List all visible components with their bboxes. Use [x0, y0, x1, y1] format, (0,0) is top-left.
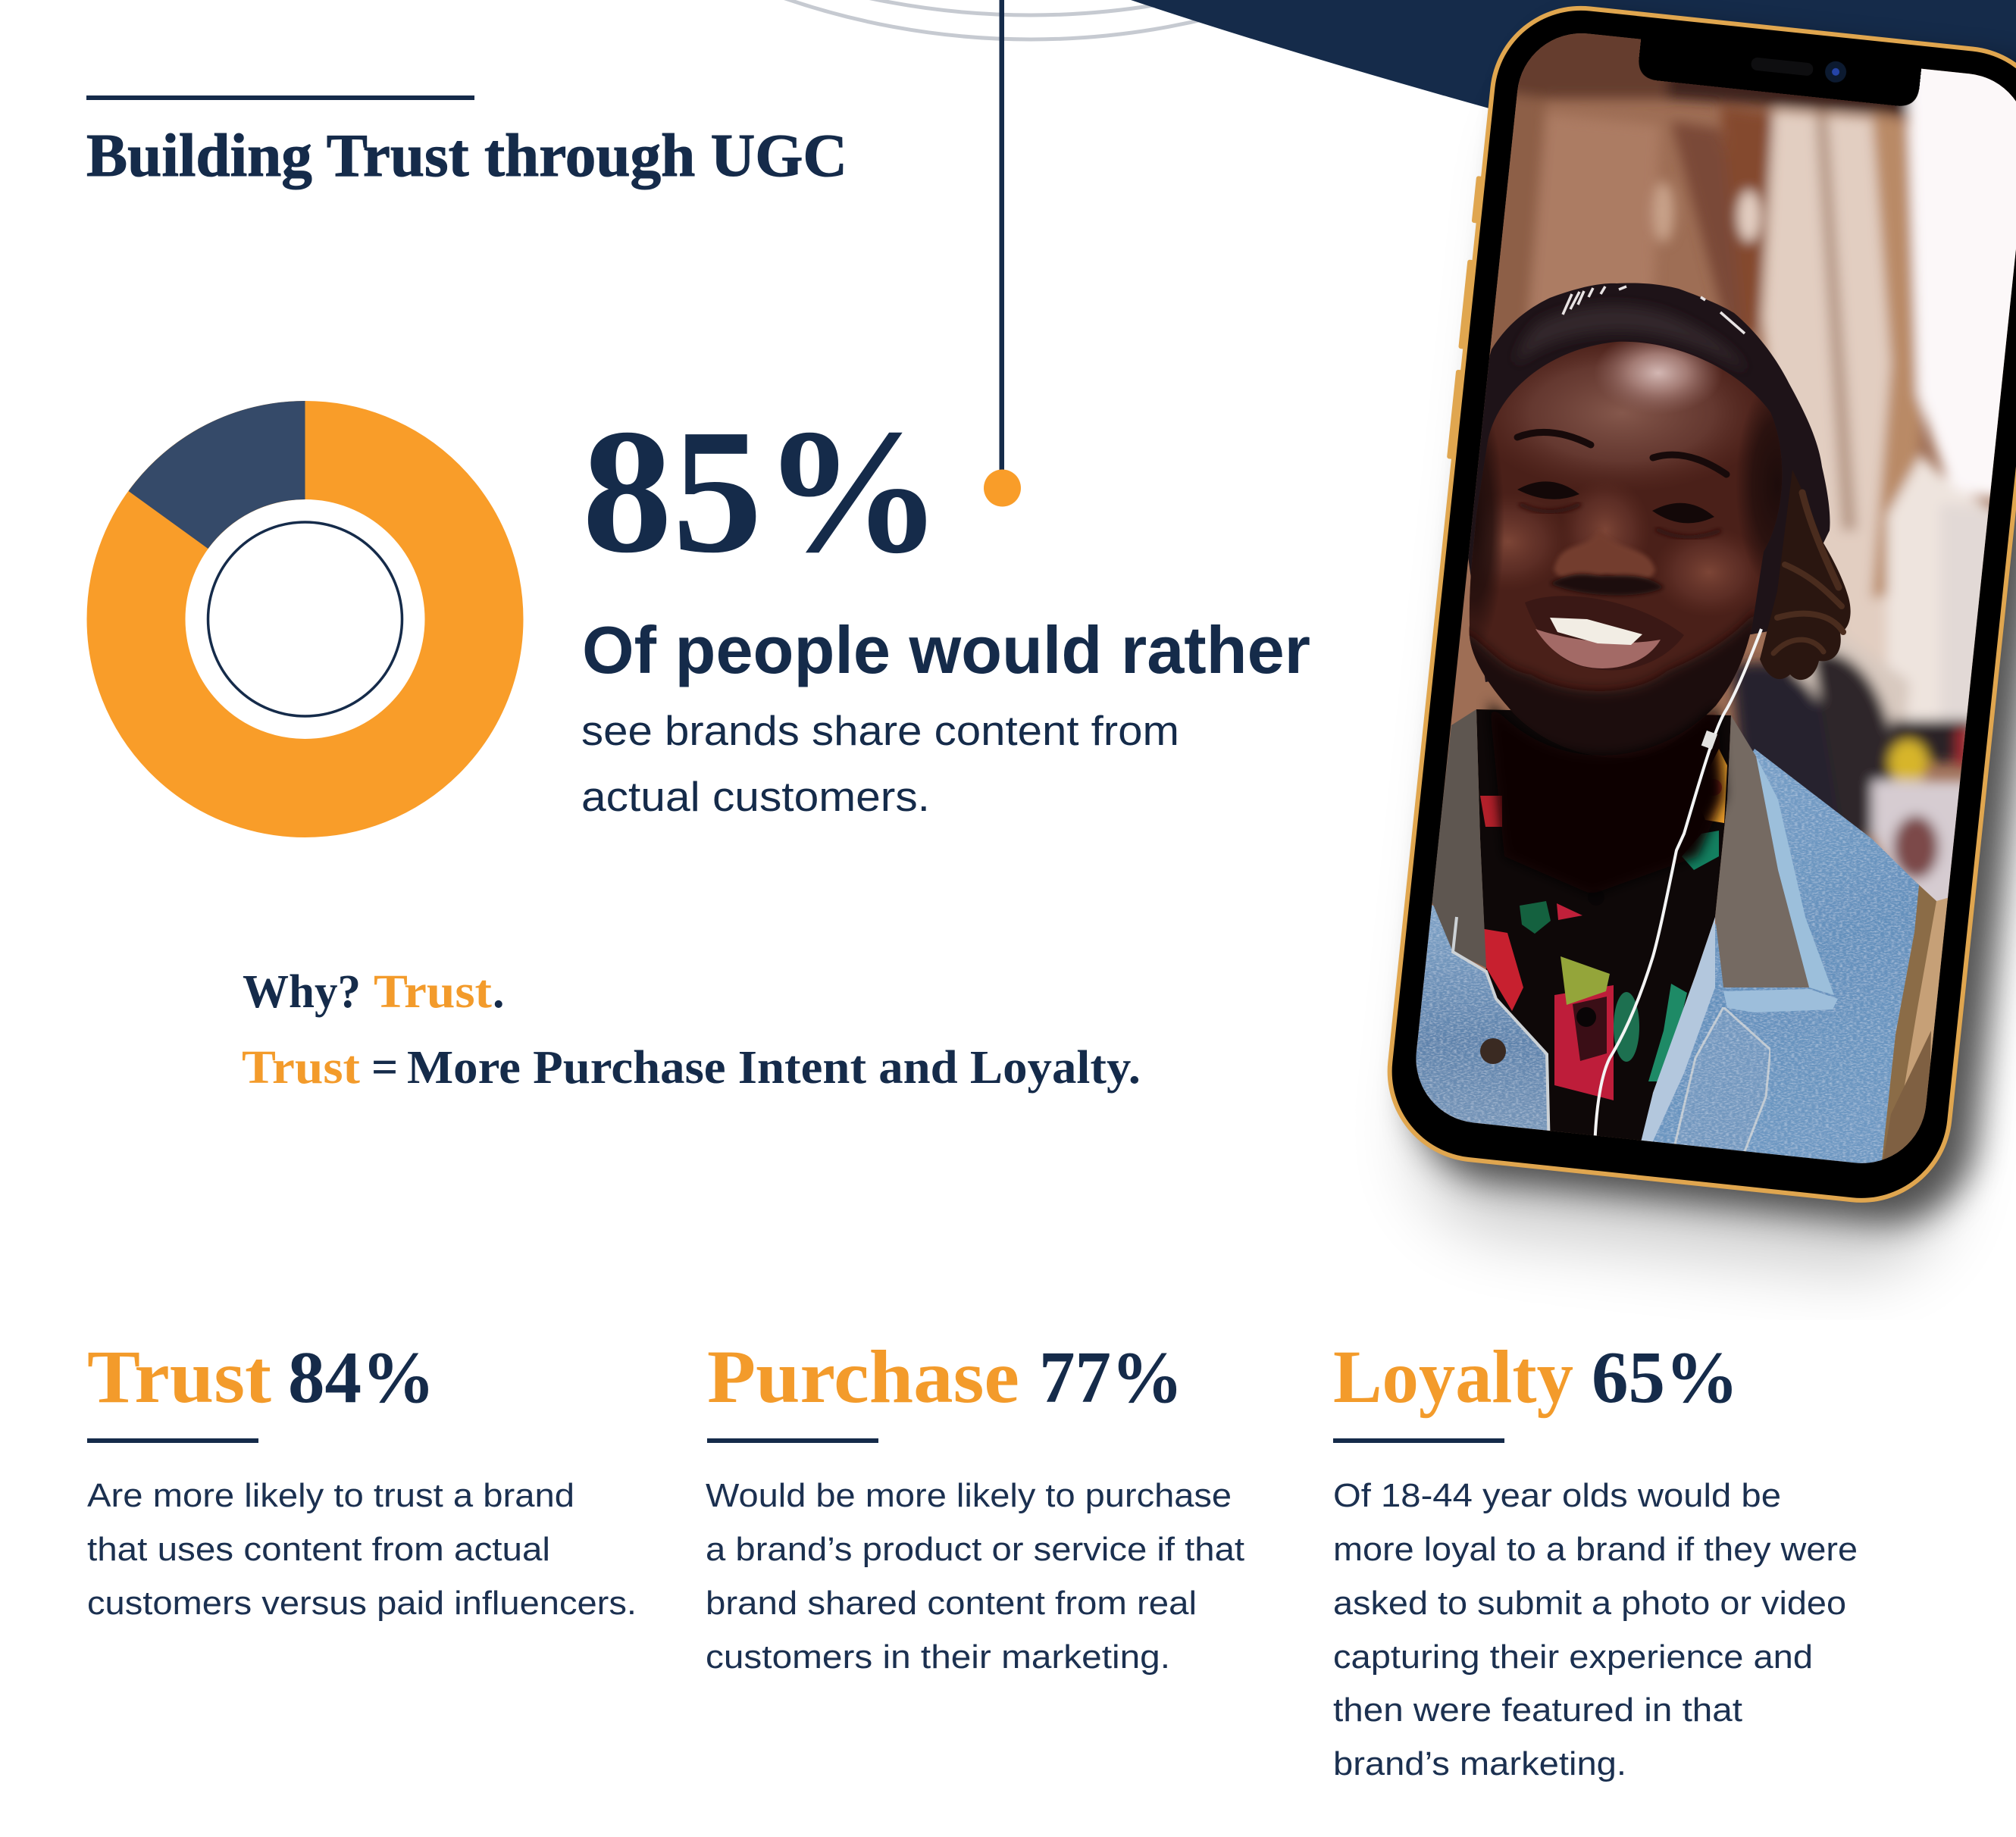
beanie: [1467, 283, 1830, 682]
stat column: loyalty: then were featured in that: [1333, 1691, 1742, 1729]
donut chart: 85 percent: [129, 401, 474, 788]
decorative grey arcs: [258, 0, 1804, 39]
stat column: trust: Are more likely to trust a brand: [87, 1477, 574, 1514]
phone body: [1374, 0, 2016, 1212]
stat description: Of people would rather: [582, 612, 1310, 687]
stat column: purchase: Would be more likely to purchase: [706, 1477, 1232, 1514]
title with rule: Building Trust through UGC: [86, 123, 847, 189]
stat column: purchase: Purchase: [707, 1335, 1019, 1419]
inner placket: [1641, 917, 1715, 1159]
phone mockup: [1364, 0, 2016, 1213]
stat column: loyalty: Of 18-44 year olds would be: [1333, 1477, 1781, 1514]
stat column: purchase: 77%: [1039, 1337, 1183, 1419]
beanie logo: [1563, 286, 1745, 333]
why trust statement: .: [493, 966, 505, 1018]
stat column: purchase: [706, 1335, 1244, 1676]
stat column: purchase: customers in their marketing.: [706, 1638, 1170, 1676]
beard: [1455, 606, 1766, 773]
stat column: loyalty: Loyalty: [1333, 1335, 1573, 1419]
right collar: [1715, 715, 1809, 987]
stat column: loyalty: [1333, 1335, 1858, 1782]
big stat: 85%: 85%: [582, 393, 943, 590]
stat column: loyalty: more loyal to a brand if they were: [1333, 1531, 1858, 1568]
notch with speaker and camera: [1637, 27, 1923, 108]
photo on the phone screen: [1416, 33, 2016, 1163]
stat column: trust: that uses content from actual: [87, 1531, 550, 1568]
shirt florals: [1480, 749, 1727, 1100]
denim collar underside: [1723, 989, 1838, 1012]
nose: [1550, 530, 1664, 596]
why trust statement: More Purchase Intent and Loyalty.: [407, 1042, 1141, 1094]
why trust statement: Why?: [243, 966, 361, 1018]
stat description: see brands share content from: [581, 707, 1179, 754]
stat column: loyalty: 65%: [1592, 1337, 1739, 1419]
neck shadow: [1489, 701, 1724, 894]
stat description: [581, 612, 1310, 820]
lapel: [1672, 1007, 1770, 1167]
phone shadow: [1404, 17, 2016, 1279]
face: [1444, 331, 1819, 773]
stat column: loyalty: capturing their experience and: [1333, 1638, 1813, 1676]
why trust statement: Trust: [374, 966, 492, 1018]
stat column: purchase: a brand’s product or service if that: [706, 1531, 1244, 1568]
stat column: trust: 84%: [288, 1337, 435, 1419]
stat column: loyalty: asked to submit a photo or video: [1333, 1585, 1846, 1622]
jacket seam and button: [1453, 917, 1549, 1152]
stat column: loyalty: brand’s marketing.: [1333, 1745, 1626, 1782]
stat column: trust: [87, 1335, 637, 1622]
dreadlocks: [1760, 470, 1851, 680]
mouth: [1525, 596, 1684, 670]
left jacket: [1416, 905, 1548, 1131]
stat column: purchase: brand shared content from real: [706, 1585, 1197, 1622]
denim jacket right side: [1645, 749, 1919, 1182]
earphone cable: [1595, 629, 1761, 1148]
stat column: trust: Trust: [87, 1335, 271, 1419]
blurred street background: [1463, 23, 2016, 940]
shirt: [1476, 709, 1731, 1159]
stat description: actual customers.: [581, 773, 930, 820]
left collar: [1432, 709, 1486, 968]
vertical connector line with dot: [984, 0, 1021, 506]
why trust statement: [242, 966, 1141, 1094]
navy corner swoosh: [1131, 0, 2016, 136]
stat column: trust: customers versus paid influencers.: [87, 1585, 637, 1622]
denim collar seam: [1756, 756, 1834, 995]
eyebrows: [1517, 432, 1726, 474]
title with rule: [86, 95, 847, 189]
why trust statement: Trust: [242, 1042, 360, 1094]
backpack strap: [1893, 882, 1948, 1087]
eyes: [1517, 481, 1720, 537]
why trust statement: =: [371, 1042, 398, 1094]
